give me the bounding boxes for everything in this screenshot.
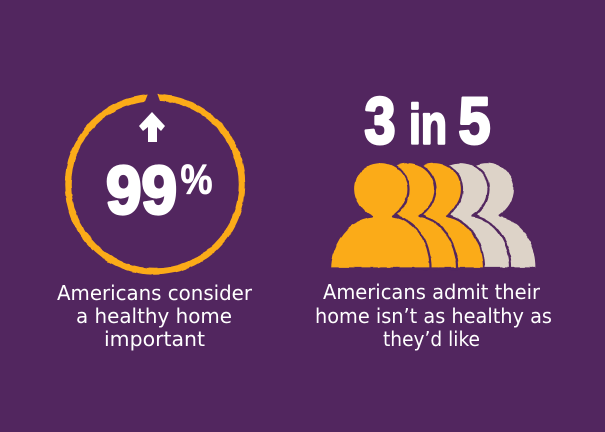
text: left caption: Americans consider — [57, 281, 253, 305]
icon: orange ring — [68, 90, 242, 272]
heading: 3 in 5: 3 — [364, 84, 396, 158]
text: right caption: they’d like — [383, 327, 480, 351]
text: left caption: important — [104, 327, 205, 351]
text: left caption: a healthy home — [76, 304, 232, 328]
text: right caption: Americans admit their — [323, 280, 541, 304]
statistic: 99%: 99 — [106, 152, 177, 228]
heading: 3 in 5: 5 — [458, 84, 490, 158]
icon: person 3 orange — [384, 162, 484, 268]
text: left caption — [57, 281, 253, 351]
heading: 3 in 5: in — [409, 92, 447, 156]
icon: person 5 beige — [436, 162, 537, 268]
icon: row of five people — [330, 162, 537, 268]
panel: 3 in 5 statistic — [315, 84, 552, 351]
icon: person 1 orange — [330, 162, 430, 268]
icon: person 4 beige — [410, 162, 510, 268]
statistic: 99%: % — [180, 156, 212, 202]
icon: person 2 orange — [356, 162, 457, 268]
icon: up arrow — [139, 112, 165, 142]
heading: 3 in 5 — [364, 84, 490, 158]
text: right caption — [315, 280, 552, 351]
panel: 99 percent statistic — [57, 90, 253, 351]
text: right caption: home isn’t as healthy as — [315, 304, 552, 328]
